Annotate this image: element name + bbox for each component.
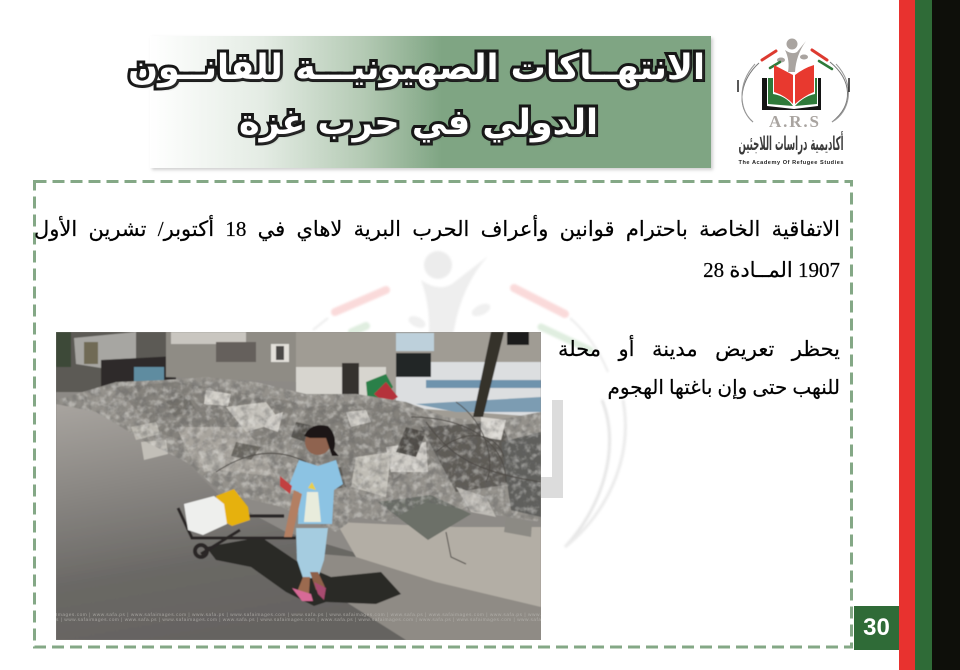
header banner [150,36,711,168]
photo yellow jerrycan [216,489,250,526]
photo white jerrycan [184,496,227,535]
photo rubble [56,377,541,540]
logo arcs [738,50,849,122]
photo girl [280,425,343,601]
logo english caption: The Academy Of Refugee Studies [738,160,844,166]
photo shadow on road [206,537,401,606]
photo road [56,402,541,640]
dashed content frame [33,180,853,648]
watermark logo [314,251,627,548]
photo: girl pulling water cart through rubble: s | www.safaimages.com | www.safa.ps | www.safaimages.com | www.safa.ps | www.safaimages.com | www.safa.ps | www.safaimages.com | www.safa.ps | www.safaimages.com | www.safa [56,617,541,623]
photo: girl pulling water cart through rubble [56,332,541,640]
side stripes [899,0,960,670]
page number [854,606,899,650]
photo watermark text: Images.com | www.safa.ps | www.safaimages.com | www.safa.ps | www.safaimages.com | www.safa.ps | www.safaimages.com | www.safa.ps | www.safaimages.com | www.safa.ps | www. [56,612,541,618]
logo [737,38,850,166]
logo book [762,65,821,110]
photo rebar tangle [216,402,541,564]
photo buildings [56,332,541,432]
logo figure [777,38,808,72]
paragraph: article text line 1: يحظر تعريض مدينة أو محلة [558,337,840,361]
title line 1: الانتهــاكات الصهيونيـــة للقانــون [128,48,705,88]
paragraph: convention heading line 1: الاتفاقية الخاصة باحترام قوانين وأعراف الحرب البرية لاهاي في 18 أكتوبر/ تشرين الأول [34,217,840,241]
title line 2: الدولي في حرب غزة [239,103,598,143]
page number: 30 [863,614,890,641]
photo cart [178,508,296,557]
paragraph: convention heading line 2: 1907 المــادة 28 [703,258,840,282]
paragraph: article text line 2: للنهب حتى وإن باغتها الهجوم [607,377,840,399]
logo initials: A.R.S [769,112,819,131]
